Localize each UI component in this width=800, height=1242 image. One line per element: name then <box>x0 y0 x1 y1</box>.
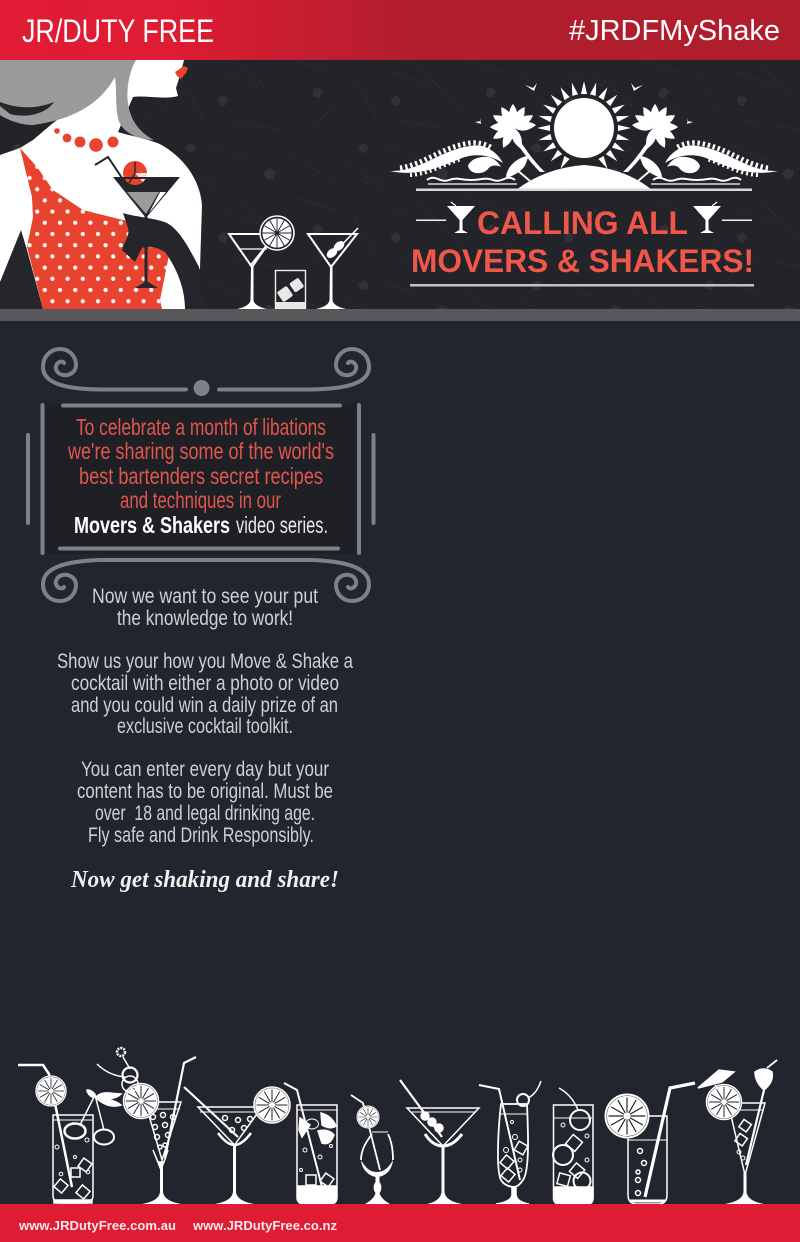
body copy: over 18 and legal drinking age. <box>95 802 315 825</box>
headline: MOVERS & SHAKERS! <box>411 243 754 279</box>
island <box>516 165 652 190</box>
glass 8: highball with cherries <box>553 1088 593 1204</box>
glass 10: cone glass with umbrella and strawberry <box>698 1060 777 1204</box>
gloved hand <box>122 213 205 309</box>
hero banner <box>0 60 800 310</box>
dark wedge under arm <box>0 230 43 309</box>
sun <box>554 98 614 158</box>
dress dots <box>27 156 167 304</box>
body copy: cocktail with either a photo or video <box>71 672 339 695</box>
body copy: You can enter every day but your <box>81 758 329 781</box>
body copy: and you could win a daily prize of an <box>71 694 338 717</box>
headline: CALLING ALL <box>477 205 688 241</box>
small glasses: martini, rocks and olive martini <box>229 216 358 310</box>
lips <box>175 66 188 79</box>
body copy: Now we want to see your put <box>92 585 318 608</box>
headline <box>410 205 754 286</box>
body copy: Fly safe and Drink Responsibly. <box>88 824 314 847</box>
left palm and fern <box>390 83 545 184</box>
hashtag: #JRDFMyShake <box>569 15 780 47</box>
row of cocktail glasses <box>18 1048 777 1204</box>
intro text in frame: video series. <box>236 512 328 538</box>
logo: JR/Duty Free: JR/DUTY FREE <box>22 13 214 49</box>
sun rays <box>537 81 631 170</box>
woman with cocktail illustration <box>0 60 205 309</box>
island sunset emblem <box>390 81 778 191</box>
title ornaments <box>416 202 752 233</box>
body copy: content has to be original. Must be <box>77 780 333 803</box>
glass 6: martini with olives <box>400 1080 479 1204</box>
call to action: Now get shaking and share! <box>70 867 339 893</box>
grey band <box>0 309 800 321</box>
intro text in frame: and techniques in our <box>120 487 281 513</box>
glass 1: highball with cherries <box>18 1065 121 1203</box>
intro text in frame: we're sharing some of the world's <box>67 438 334 464</box>
glass 9: tumbler with citrus and straw <box>606 1083 695 1204</box>
intro text in frame <box>67 414 334 538</box>
glass 4: highball with mint and ice <box>284 1083 337 1204</box>
body copy: exclusive cocktail toolkit. <box>117 715 293 738</box>
hair shadow <box>0 102 54 116</box>
footer website links: www.JRDutyFree.com.au <box>18 1218 176 1233</box>
glass 5: small snifter <box>351 1095 393 1204</box>
right palm and fern <box>623 83 778 184</box>
glass 7: tall tulip with cherry <box>479 1081 541 1204</box>
glass 3: martini with citrus wheel <box>184 1087 290 1204</box>
body copy: the knowledge to work! <box>117 607 293 630</box>
intro text in frame: To celebrate a month of libations <box>76 414 326 440</box>
necklace <box>54 128 119 152</box>
hair <box>0 60 154 140</box>
footer bar: www.JRDutyFree.co.nz <box>192 1218 338 1233</box>
woman's skin silhouette <box>0 60 202 309</box>
intro text in frame: best bartenders secret recipes <box>79 463 323 489</box>
body copy: Show us your how you Move & Shake a <box>57 650 353 673</box>
dress <box>20 148 170 309</box>
header bar <box>0 0 800 60</box>
body copy <box>57 585 353 847</box>
glass 2: flute with citrus and straw <box>97 1048 196 1204</box>
intro text in frame: Movers & Shakers <box>74 512 230 538</box>
footer bar <box>0 1204 800 1242</box>
ornamental frame <box>28 349 374 601</box>
held cocktail <box>95 157 180 288</box>
